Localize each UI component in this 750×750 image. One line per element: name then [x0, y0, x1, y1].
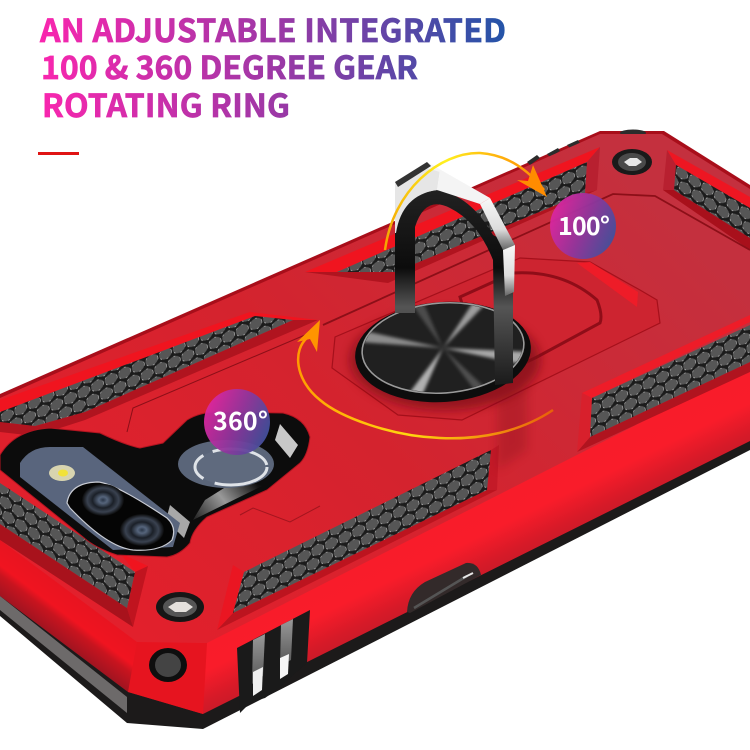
lens lower: [120, 514, 164, 546]
honeycomb strip: middle: [233, 450, 491, 613]
case bottom black edge: [0, 400, 750, 729]
honeycomb strip: upper left: [0, 316, 293, 426]
loop silver right post: [503, 245, 515, 296]
top buttons: [527, 130, 646, 165]
honeycomb strip: upper centre: [337, 162, 587, 272]
phone case: [0, 130, 750, 729]
case right side wall: [150, 340, 750, 714]
top dark rim: [0, 131, 750, 420]
connector grip: [237, 610, 310, 713]
screw upper right: [612, 149, 652, 175]
ring loop dark arch: [395, 190, 513, 385]
flash core: [58, 470, 68, 476]
arrow: 360 degree: [297, 320, 553, 438]
case left side wall: [0, 530, 203, 714]
arrow: 100 degree: [385, 153, 547, 250]
bezel silver reflections: [275, 424, 298, 458]
ring slider pill: [460, 273, 601, 375]
title: [39, 6, 506, 127]
badge: 360 degrees: 360°: [213, 402, 268, 438]
honeycomb strip: right: [590, 325, 750, 437]
ring shadow: [350, 310, 540, 410]
octagon recess around ring: [332, 258, 660, 420]
fingerprint ring: [195, 449, 267, 485]
case grey left edge: [0, 596, 127, 713]
red accent line: [38, 152, 79, 155]
title: AN ADJUSTABLE INTEGRATED: [39, 6, 506, 52]
case back surface: [0, 134, 750, 643]
lens upper: [82, 484, 124, 516]
recess lines: [127, 194, 750, 522]
ring holder: [350, 162, 540, 410]
loop silver shoulder: [480, 198, 515, 250]
slider bright bevel: [577, 262, 638, 307]
badge: 360 degrees: [204, 389, 270, 455]
camera bezel: [0, 412, 310, 557]
badge: 100 degrees: [550, 193, 616, 259]
flash: [49, 465, 75, 481]
title: ROTATING RING: [42, 81, 290, 127]
badge: 100 degrees: 100°: [558, 207, 610, 243]
ring disc: [363, 304, 523, 392]
ring base: [352, 296, 534, 408]
bevel highlights: [0, 147, 750, 630]
title: 100 & 360 DEGREE GEAR: [41, 43, 418, 89]
case corner: [128, 642, 207, 714]
lens capsule: [67, 482, 174, 550]
loop silver top: [420, 162, 490, 204]
loop silver left: [395, 162, 440, 233]
screw lower left: [156, 592, 204, 622]
disc rim: [359, 297, 527, 399]
side button: [407, 563, 481, 613]
screw corner: [149, 648, 187, 682]
fingerprint plate: [178, 440, 274, 488]
honeycomb strip: lower left: [0, 483, 135, 608]
reflection below ring: [497, 385, 527, 470]
camera module: [0, 412, 310, 557]
loop dark edge: [395, 162, 431, 187]
honeycomb strip: upper right: [674, 165, 750, 238]
grey plate: [20, 447, 180, 550]
